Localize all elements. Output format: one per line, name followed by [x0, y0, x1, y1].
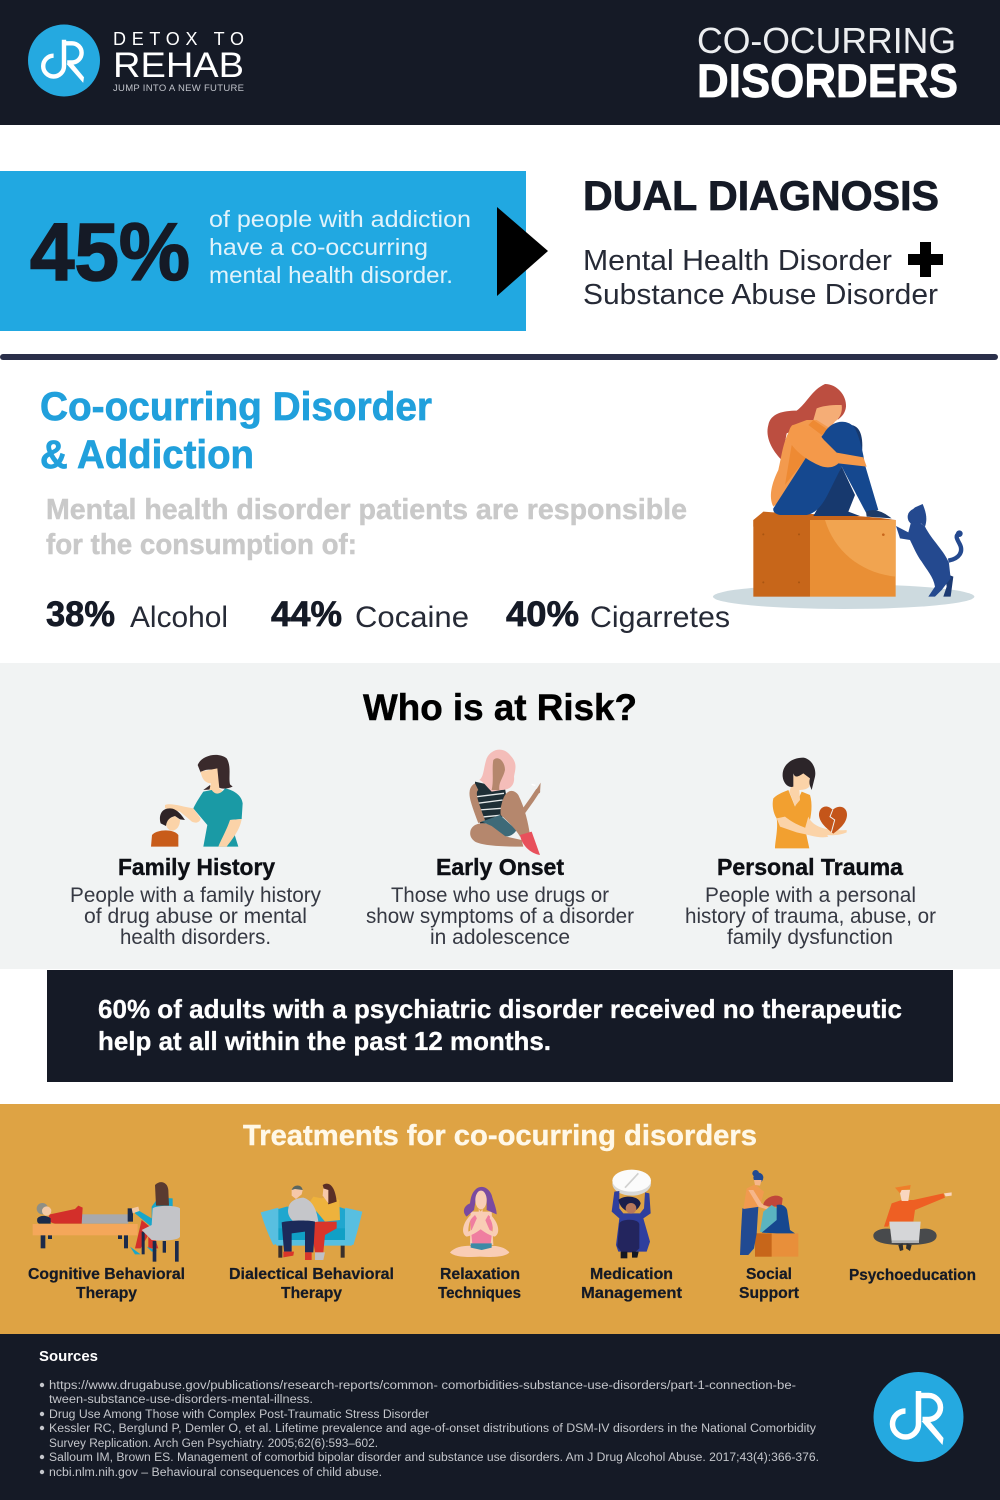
- item: personal trauma: history of trauma, abuse, or: [685, 905, 936, 928]
- label: social support: Social: [746, 1266, 792, 1283]
- heading: Treatments for co-ocurring disorders: [243, 1120, 757, 1152]
- item: early onset: show symptoms of a disorder: [366, 905, 634, 928]
- icon: plus: [908, 242, 943, 277]
- statistics row: Cocaine: [355, 601, 469, 634]
- statistics row: 44%: [271, 595, 342, 634]
- item: early onset: Early Onset: [436, 854, 564, 880]
- item: family history: People with a family history: [70, 884, 321, 907]
- cat: [896, 504, 963, 597]
- sources list: ncbi.nlm.nih.gov – Behavioural consequences of child abuse.: [49, 1467, 382, 1479]
- item: family history: [70, 854, 321, 949]
- label: relaxation techniques: Relaxation: [440, 1266, 520, 1283]
- statistic text: of people with addiction: [209, 206, 471, 232]
- panel: treatments: [0, 1104, 1000, 1334]
- heading: co-ocurring disorder and addiction: Co-ocurring Disorder: [40, 385, 432, 429]
- panel: 45 percent statistic: [0, 171, 526, 331]
- item: family history: of drug abuse or mental: [84, 905, 307, 928]
- label: relaxation techniques: Techniques: [438, 1285, 521, 1302]
- item: early onset: in adolescence: [430, 926, 570, 949]
- dual diagnosis block: DUAL DIAGNOSIS: [583, 172, 939, 219]
- icon: therapy couch: [33, 1182, 180, 1262]
- icon: teen girl sitting: [470, 750, 541, 855]
- title: CO-OCURRING: [697, 20, 956, 61]
- logo wordmark: JUMP INTO A NEW FUTURE: [113, 83, 244, 94]
- statistic text: have a co-occurring: [209, 234, 428, 260]
- icon: couple on sofa: [261, 1184, 362, 1260]
- label: dialectical behavioral therapy: Dialectical Behavioral: [229, 1266, 394, 1283]
- statistics row: 40%: [506, 595, 579, 634]
- icon: person holding pill: [612, 1170, 651, 1258]
- sources list: Survey Replication. Arch Gen Psychiatry. 2005;62(6):593–602.: [49, 1438, 378, 1450]
- illustration: woman on box with cat: [713, 384, 974, 609]
- label: cognitive behavioral therapy: Therapy: [76, 1285, 137, 1302]
- item: family history: Family History: [118, 854, 275, 880]
- sources list: https://www.drugabuse.gov/publications/research-reports/common- comorbidities-substance-use-disorders/part-1-connection-be-: [49, 1380, 796, 1392]
- icon: meditating woman: [450, 1187, 509, 1257]
- title: [697, 20, 958, 107]
- icon: woman with broken heart: [773, 758, 847, 848]
- callout: 60 percent: 60% of adults with a psychiatric disorder received no therapeutic: [98, 994, 902, 1024]
- logo wordmark: DETOX TO: [113, 29, 244, 49]
- panel: who is at risk: [0, 663, 1000, 969]
- statistics row: Alcohol: [130, 601, 228, 634]
- label: cognitive behavioral therapy: Cognitive Behavioral: [28, 1266, 185, 1283]
- item: early onset: Those who use drugs or: [391, 884, 609, 907]
- icon: person with laptop: [873, 1185, 952, 1251]
- logo mark: [28, 24, 100, 96]
- text: patients intro: Mental health disorder patients are responsible: [46, 494, 687, 526]
- statistic text: mental health disorder.: [209, 262, 453, 288]
- item: personal trauma: People with a personal: [705, 884, 916, 907]
- heading: co-ocurring disorder and addiction: & Addiction: [40, 433, 254, 477]
- dual diagnosis block: Substance Abuse Disorder: [583, 279, 938, 311]
- sources heading: Sources: [39, 1348, 98, 1365]
- sources list: [40, 1380, 819, 1479]
- heading: co-ocurring disorder and addiction: [40, 385, 432, 477]
- item: family history: health disorders.: [120, 926, 271, 949]
- item: personal trauma: [685, 854, 936, 949]
- dual diagnosis block: [583, 172, 943, 311]
- label: social support: [739, 1266, 800, 1302]
- header band: [0, 0, 1000, 125]
- sources list: tween-substance-use-disorders-mental-illness.: [49, 1394, 313, 1406]
- label: dialectical behavioral therapy: [229, 1266, 394, 1302]
- sources list: Drug Use Among Those with Complex Post-Traumatic Stress Disorder: [49, 1409, 429, 1421]
- statistics row: 38%: [46, 595, 115, 634]
- label: dialectical behavioral therapy: Therapy: [281, 1285, 342, 1302]
- callout: 60 percent: [47, 970, 953, 1082]
- label: social support: Support: [739, 1285, 800, 1302]
- sources list: Kessler RC, Berglund P, Demler O, et al. Lifetime prevalence and age-of-onset distributions of DSM-IV disorders in the National Comorbidity: [49, 1423, 816, 1435]
- label: medication management: Medication: [590, 1266, 673, 1283]
- label: psychoeducation: Psychoeducation: [849, 1267, 976, 1284]
- arrow: [497, 207, 548, 296]
- statistics row: [46, 595, 730, 634]
- text: patients intro: for the consumption of:: [46, 529, 357, 561]
- panel: 45 percent statistic: 45%: [30, 207, 190, 298]
- label: cognitive behavioral therapy: [28, 1266, 185, 1302]
- item: personal trauma: Personal Trauma: [717, 854, 903, 880]
- text: patients intro: [46, 494, 687, 561]
- label: medication management: [581, 1266, 683, 1302]
- dual diagnosis block: Mental Health Disorder: [583, 245, 892, 277]
- heading: Who is at Risk?: [363, 687, 637, 728]
- callout: 60 percent: help at all within the past 12 months.: [98, 1026, 551, 1056]
- icon: friend comforting woman on box: [740, 1170, 798, 1257]
- label: medication management: Management: [581, 1285, 683, 1302]
- logo wordmark: [113, 29, 244, 94]
- sources list: Salloum IM, Brown ES. Management of comorbid bipolar disorder and substance use disorders. Am J Drug Alcohol Abuse. 2017;43(4):366-376.: [49, 1452, 819, 1464]
- title: DISORDERS: [697, 54, 958, 107]
- item: early onset: [366, 854, 634, 949]
- statistics row: Cigarretes: [590, 601, 730, 634]
- logo mark: footer: [874, 1372, 964, 1462]
- icon: mother and child: [151, 755, 243, 847]
- item: personal trauma: family dysfunction: [727, 926, 893, 949]
- label: relaxation techniques: [438, 1266, 521, 1302]
- logo wordmark: REHAB: [113, 46, 244, 85]
- statistic text: [209, 206, 471, 288]
- footer panel: sources: [0, 1334, 1000, 1500]
- logo: Detox to Rehab: [28, 24, 244, 96]
